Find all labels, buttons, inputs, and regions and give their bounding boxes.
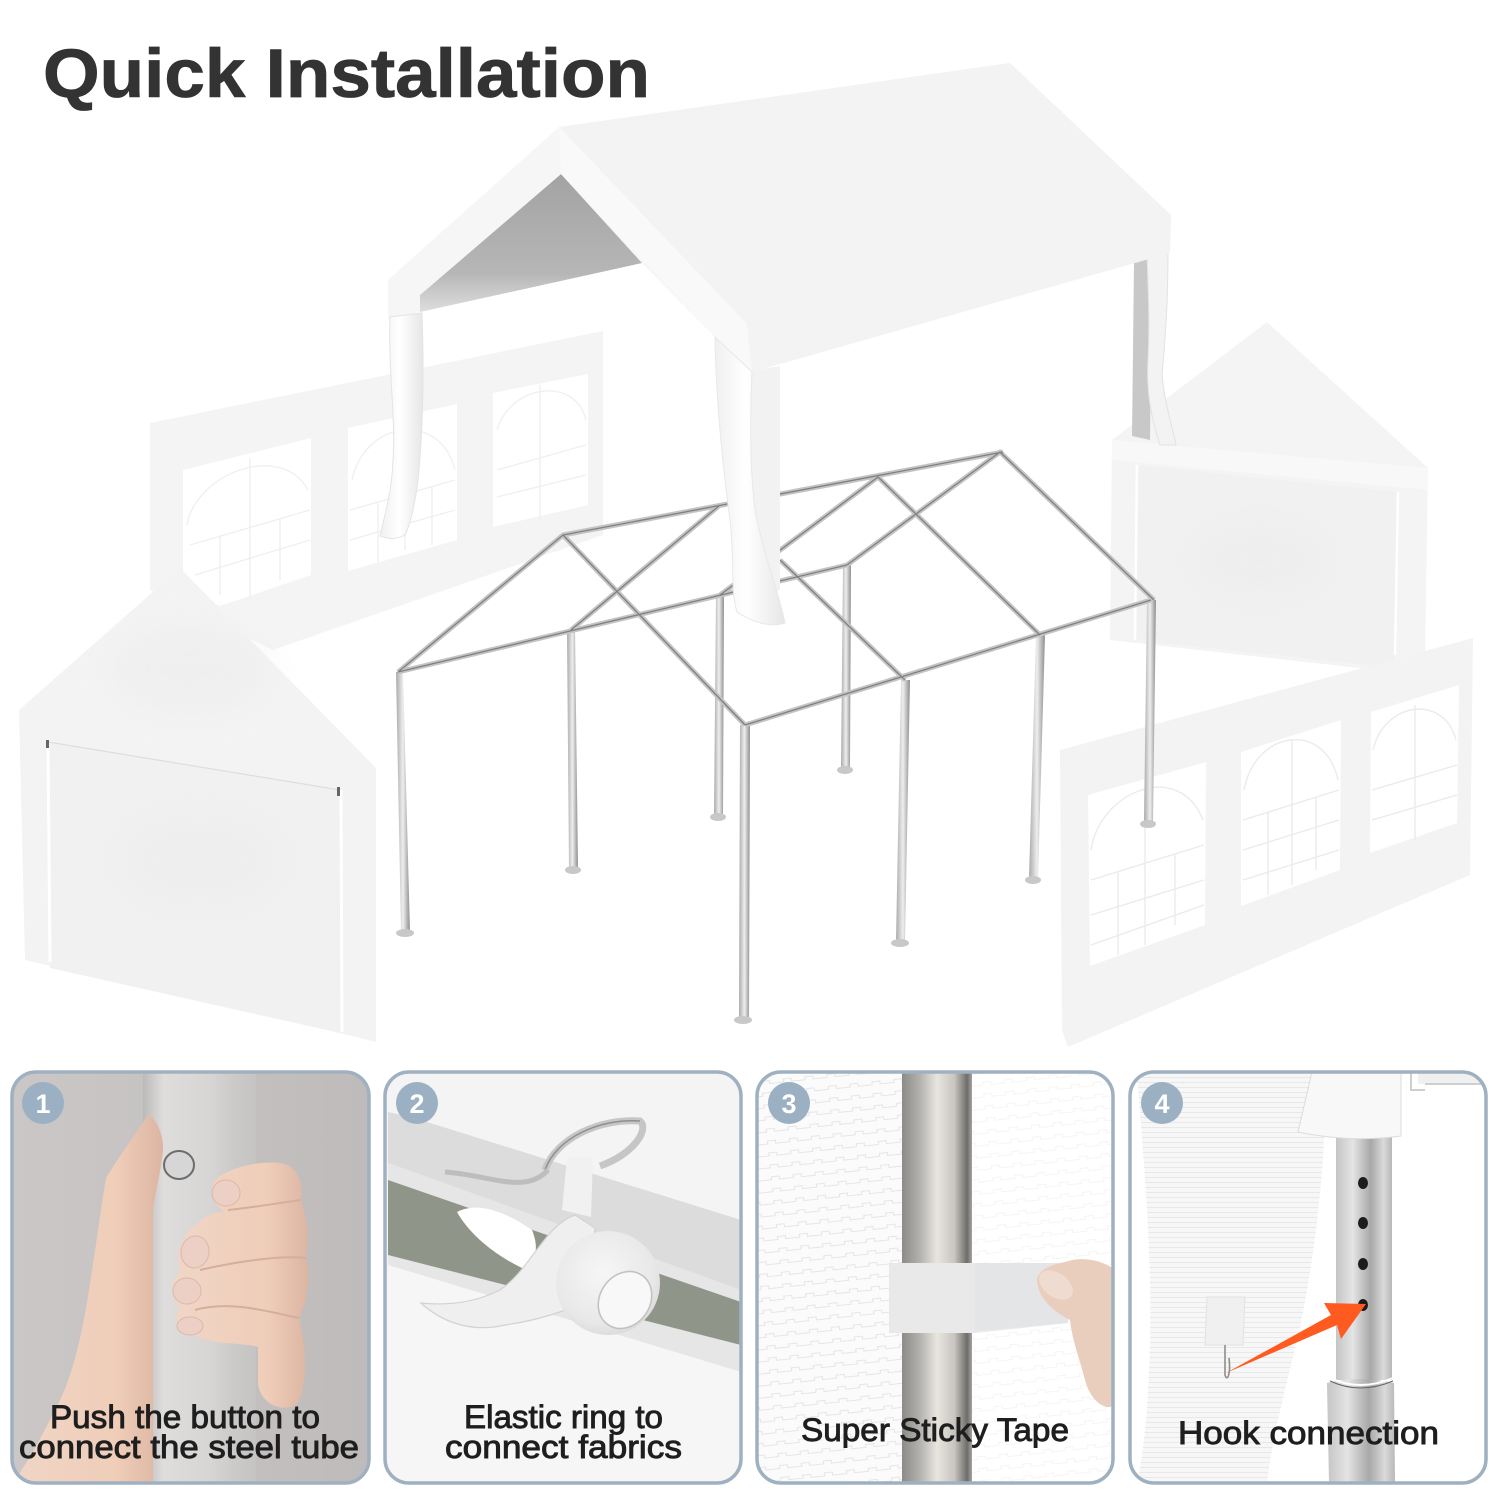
caption 2: Elastic ring to xyxy=(464,1399,663,1435)
steel frame xyxy=(396,452,1156,1024)
caption 1: connect the steel tube xyxy=(19,1429,359,1465)
caption 2: connect fabrics xyxy=(445,1429,682,1465)
title: Quick Installation xyxy=(43,35,650,112)
frame legs xyxy=(396,565,1156,1024)
step number 4: 4 xyxy=(1154,1089,1170,1119)
canopy xyxy=(380,63,1176,625)
pole holes xyxy=(1358,1177,1368,1311)
curtain xyxy=(1137,1072,1326,1483)
step number 3 xyxy=(768,1082,810,1124)
button xyxy=(164,1151,194,1179)
canopy inner underside xyxy=(420,174,642,312)
orange arrow xyxy=(1226,1303,1366,1373)
frame beams xyxy=(398,452,1154,725)
canopy back left curtain xyxy=(380,313,423,538)
side wall: back left xyxy=(150,331,603,650)
side wall: front right xyxy=(1060,638,1473,1047)
hand holding tape xyxy=(1034,1259,1115,1407)
step number 2 xyxy=(396,1082,438,1124)
caption 3: Super Sticky Tape xyxy=(801,1412,1069,1448)
panel 2: elastic ring xyxy=(385,1072,741,1483)
hook tab xyxy=(1205,1297,1245,1378)
caption 1: Push the button to xyxy=(50,1399,320,1435)
canopy back right curtain xyxy=(1132,250,1176,445)
side wall: front left gable xyxy=(19,568,376,1042)
canopy roof xyxy=(388,63,1171,372)
canopy front curtain xyxy=(715,337,785,625)
adjustable pole xyxy=(1327,1130,1395,1483)
side wall: right gable xyxy=(1110,322,1428,672)
caption 2 xyxy=(445,1399,682,1465)
finger creases xyxy=(195,1200,306,1318)
top bracket xyxy=(1418,1074,1480,1084)
caption 1 xyxy=(19,1399,359,1465)
elastic band xyxy=(421,1215,595,1328)
right fingers xyxy=(172,1162,308,1408)
ball xyxy=(556,1231,660,1335)
step number 2: 2 xyxy=(409,1089,425,1119)
panel 3: sticky tape xyxy=(757,1072,1115,1483)
ring hook xyxy=(445,1121,643,1217)
left thumb and wrist xyxy=(8,1115,163,1490)
caption 4: Hook connection xyxy=(1178,1415,1439,1451)
fabric sleeve xyxy=(1298,1072,1401,1139)
step number 1 xyxy=(22,1082,64,1124)
panel 1: push button xyxy=(8,1072,369,1490)
step number 1: 1 xyxy=(35,1089,51,1119)
tape xyxy=(889,1263,1068,1333)
panel 4: hook connection xyxy=(1130,1072,1486,1483)
fingernails xyxy=(173,1180,240,1335)
step number 4 xyxy=(1141,1082,1183,1124)
step number 3: 3 xyxy=(781,1089,797,1119)
